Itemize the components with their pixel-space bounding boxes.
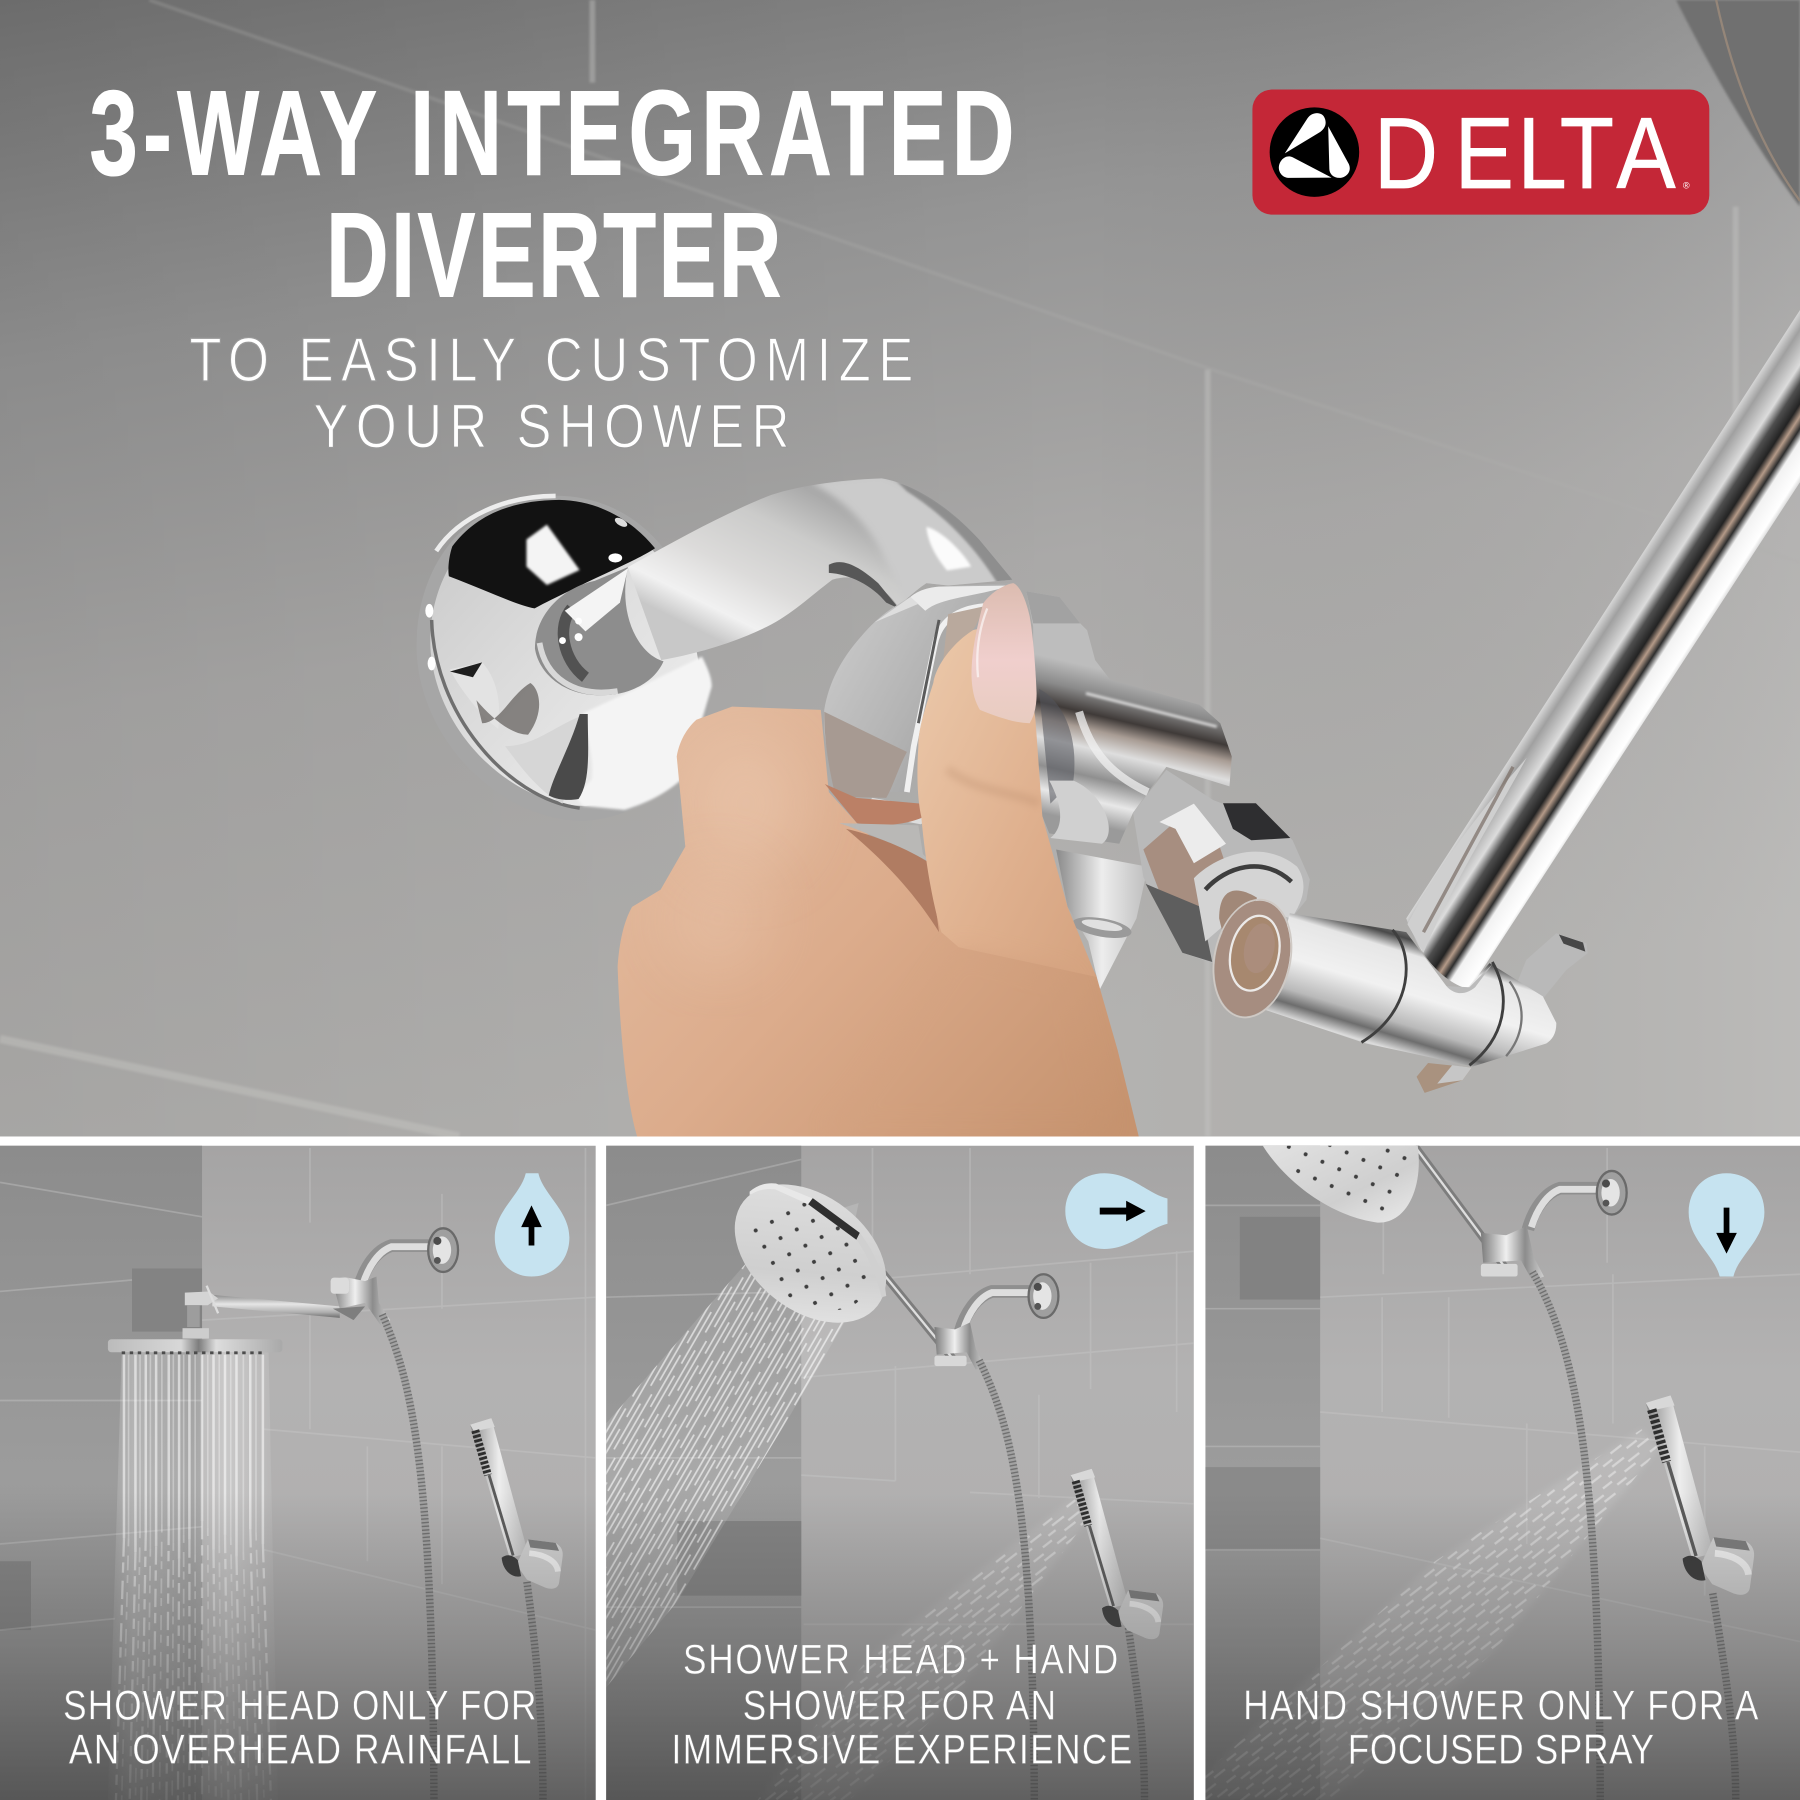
subtitle: TO EASILY CUSTOMIZE <box>189 326 913 395</box>
gradient overlay <box>1205 1492 1800 1800</box>
cropped shower head <box>1263 1146 1508 1272</box>
hose <box>382 1314 543 1800</box>
logo: Delta: ® <box>1683 180 1690 190</box>
shadowed wedge <box>846 829 939 932</box>
diverter <box>934 1322 985 1370</box>
caption <box>63 1683 536 1773</box>
panel: shower head plus hand shower <box>606 1146 1194 1800</box>
joint cap <box>1212 899 1292 1018</box>
overhead rain head on horizontal rod <box>108 1286 340 1353</box>
marble wall <box>0 1146 596 1800</box>
gradient overlay <box>0 1492 596 1800</box>
caption: SHOWER HEAD ONLY FOR <box>63 1683 536 1729</box>
panel: shower head only <box>0 1146 596 1800</box>
hand shower in holder <box>1070 1469 1163 1639</box>
caption: AN OVERHEAD RAINFALL <box>69 1727 531 1773</box>
hose <box>979 1360 1145 1800</box>
caption: HAND SHOWER ONLY FOR A <box>1243 1683 1759 1729</box>
marble wall <box>606 1146 1194 1800</box>
skin light patches <box>706 762 788 934</box>
panel: hand shower only <box>1205 1146 1800 1800</box>
thumb reflected in lever <box>824 712 907 798</box>
wall flange <box>417 496 712 821</box>
caption <box>1243 1683 1759 1773</box>
slider clamp and pins <box>1266 913 1588 1093</box>
main spray <box>606 1234 847 1688</box>
gradient overlay <box>606 1492 1194 1800</box>
logo: Delta: DELTA <box>1374 98 1676 210</box>
hand shower in holder <box>470 1418 563 1589</box>
shower arm and flange <box>359 1228 458 1287</box>
hand shower in holder <box>1646 1395 1754 1595</box>
caption: SHOWER HEAD + HAND <box>683 1637 1118 1683</box>
shower head edge top right <box>1676 0 1800 207</box>
palm and thumb <box>618 707 1139 1136</box>
icon: water drop pointing right with arrow <box>1065 1173 1167 1249</box>
wall gap between thumb and finger <box>840 823 926 860</box>
title: DIVERTER <box>326 189 781 323</box>
logo: Delta <box>1252 90 1709 215</box>
hand shower spray <box>1205 1429 1659 1800</box>
fingernail <box>971 583 1037 723</box>
arm neck <box>535 567 664 695</box>
title <box>90 67 1014 323</box>
swivel joint <box>1133 770 1310 963</box>
marble wall <box>1205 1146 1800 1800</box>
knuckle crease <box>947 769 1039 804</box>
rainfall water <box>108 1352 278 1800</box>
shower arm and flange <box>960 1274 1058 1333</box>
hose <box>1533 1272 1736 1800</box>
icon: water drop pointing up with arrow <box>495 1173 569 1277</box>
flange lower reflections <box>450 662 496 708</box>
tile wall <box>0 0 1800 1136</box>
diverter <box>331 1277 390 1326</box>
reddish fold under thumb <box>825 784 923 825</box>
caption <box>672 1637 1132 1773</box>
diverter body <box>1026 591 1232 844</box>
hand shower spray <box>758 1498 1091 1800</box>
tilted shower head <box>708 1156 955 1361</box>
index finger <box>917 620 1096 977</box>
diverter handle lever <box>824 583 1012 824</box>
caption: IMMERSIVE EXPERIENCE <box>672 1727 1132 1773</box>
hand <box>618 583 1139 1136</box>
panel: hero photo of hand turning the diverter <box>0 0 1800 1136</box>
icon: Delta tri-petal mark <box>1270 107 1359 197</box>
icon: water drop pointing down with arrow <box>1689 1173 1764 1277</box>
shower arm <box>535 473 1022 695</box>
arm underside hook <box>829 562 899 608</box>
diverter <box>1481 1226 1544 1281</box>
subtitle <box>189 326 913 462</box>
caption: SHOWER FOR AN <box>743 1683 1056 1729</box>
caption: FOCUSED SPRAY <box>1348 1727 1654 1773</box>
shower arm and flange <box>1528 1171 1627 1229</box>
subtitle: YOUR SHOWER <box>313 393 790 462</box>
title: 3-WAY INTEGRATED <box>90 67 1014 201</box>
rail rod <box>1406 310 1800 990</box>
lower hose tube and nut <box>1056 849 1148 990</box>
